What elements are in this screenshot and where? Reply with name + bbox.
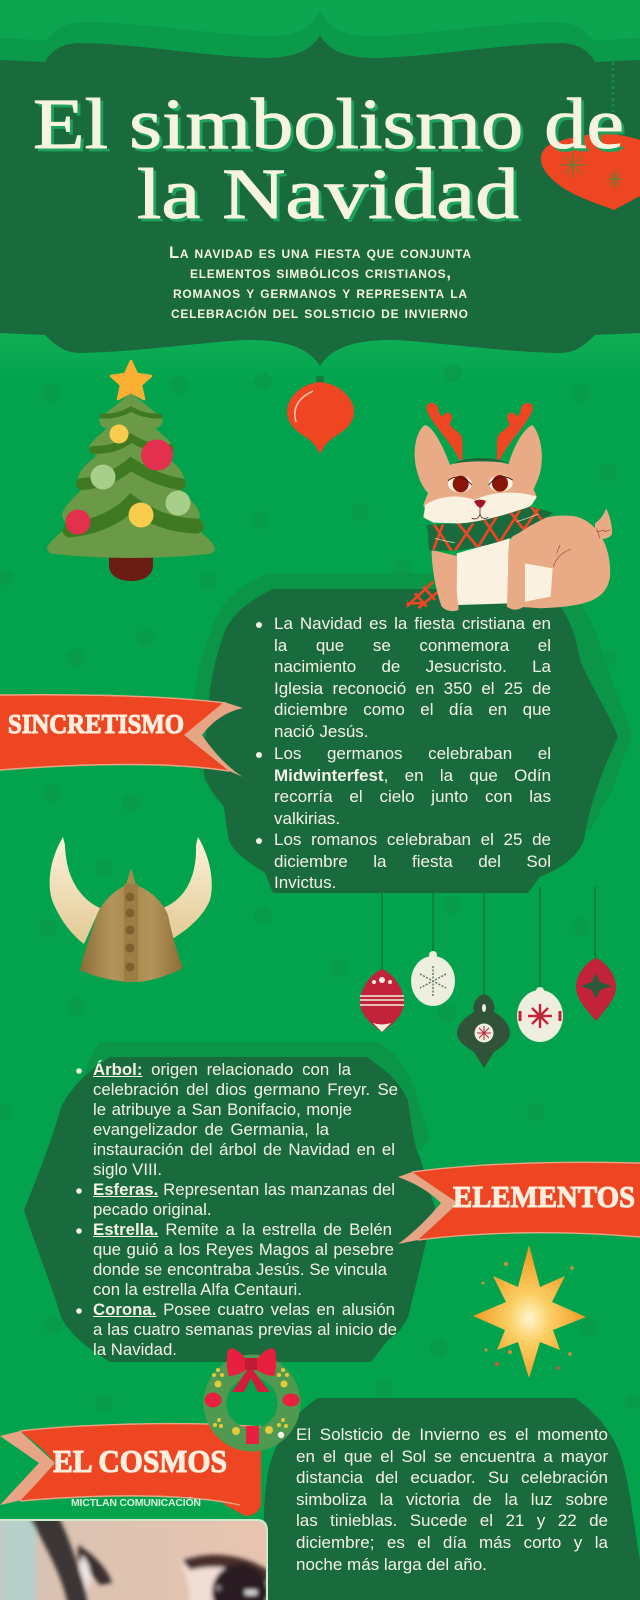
text block: esferas xyxy=(76,1180,395,1219)
subtitle: La navidad es una fiesta que conjunta xyxy=(169,244,471,262)
text block: arbol: Árbol: origen relacionado con la xyxy=(93,1060,351,1079)
title: El simbolismo de xyxy=(36,87,627,167)
panel: elementos back xyxy=(24,1042,435,1362)
icon: red striped ornament xyxy=(360,969,404,1032)
text block: los romanos: Los romanos celebraban el 25 de xyxy=(274,830,551,849)
text block: arbol xyxy=(76,1060,398,1179)
text block: corona: la Navidad. xyxy=(93,1340,177,1359)
text block: la navidad: diciembre como el día en que xyxy=(274,700,551,719)
text block: arbol: le atribuye a San Bonifacio, monje xyxy=(93,1100,352,1119)
text block: estrella: que guió a los Reyes Magos al pesebre xyxy=(93,1240,394,1259)
text block: la navidad: nacimiento de Jesucristo. La xyxy=(274,657,551,676)
text block: estrella: con la estrella Alfa Centauri. xyxy=(93,1280,302,1299)
icon: white snowflake ball xyxy=(411,951,455,1006)
icon: reindeer corgi xyxy=(407,403,612,611)
text block: estrella: Estrella. Remite a la estrella de Belén xyxy=(93,1220,392,1239)
text block: los germanos: valkirias. xyxy=(274,809,340,828)
text block: corona: Corona. Posee cuatro velas en alusión xyxy=(93,1300,395,1319)
icon: gold star xyxy=(473,1245,586,1378)
text block: los germanos: recorría el cielo junto con las xyxy=(274,787,551,806)
text block: corona: a las cuatro semanas previas al inicio de xyxy=(93,1320,397,1339)
text block: los germanos: Midwinterfest, en la que Odín xyxy=(274,766,551,785)
text block: los germanos xyxy=(256,744,551,828)
text block: la navidad: La Navidad es la fiesta cristiana en xyxy=(274,614,551,633)
subtitle: celebración del solsticio de invierno xyxy=(171,304,468,322)
photo: webcam inset xyxy=(0,1515,270,1600)
bullet text: el cosmos: diciembre; es el día más corto y la xyxy=(296,1533,608,1552)
header panel xyxy=(0,8,640,366)
ribbon: el cosmos xyxy=(0,1424,261,1516)
text block: arbol: siglo VIII. xyxy=(93,1160,162,1179)
heading: sincretismo: SINCRETISMO xyxy=(8,709,184,739)
icon: wreath xyxy=(204,1348,300,1444)
bullet text: el cosmos: las tinieblas. Sucede el 21 y 22 de xyxy=(296,1511,608,1530)
icon: red bauble xyxy=(287,376,354,454)
text block: arbol: evangelizador de Germania, la xyxy=(93,1120,329,1139)
bullet text: el cosmos: noche más larga del año. xyxy=(296,1555,487,1574)
hanging ornaments xyxy=(360,887,616,1068)
bullet text: el cosmos: simboliza la victoria de la luz sobre xyxy=(296,1490,608,1509)
text block: la navidad: Iglesia reconoció en 350 el 25 de xyxy=(274,679,551,698)
heading: el cosmos: EL COSMOS xyxy=(53,1443,227,1479)
text block: los romanos: Invictus. xyxy=(274,873,336,892)
text block: la navidad xyxy=(256,614,551,741)
panel: el cosmos xyxy=(264,1398,640,1600)
text block: la navidad: nació Jesús. xyxy=(274,722,368,741)
text block: los romanos xyxy=(256,830,551,892)
icon: red ornament in header xyxy=(541,62,640,210)
icon: dark ornament xyxy=(457,994,510,1068)
subtitle: romanos y germanos y representa la xyxy=(173,284,467,302)
panel: sincretismo back xyxy=(192,573,632,893)
credit: mictlan comunicacion: MICTLAN COMUNICACIÓN xyxy=(71,1496,201,1509)
icon: tree star xyxy=(111,361,151,399)
icon: red teardrop ornament xyxy=(576,958,616,1021)
ribbon: sincretismo xyxy=(0,695,243,777)
icon: viking helmet xyxy=(50,837,212,982)
bullet text: el cosmos: El Solsticio de Invierno es el momento xyxy=(296,1425,608,1444)
text block: corona xyxy=(76,1300,397,1359)
icon: christmas tree xyxy=(47,361,215,581)
bullet text: el cosmos xyxy=(278,1425,608,1574)
text block: estrella xyxy=(76,1220,394,1299)
title xyxy=(33,84,627,237)
subtitle xyxy=(169,244,471,322)
icon: tree baubles xyxy=(66,424,190,534)
bullet text: el cosmos: distancia del ecuador. Su celebración xyxy=(296,1468,608,1487)
text block: los germanos: Los germanos celebraban el xyxy=(274,744,551,763)
text block: la navidad: la que se conmemora el xyxy=(274,636,551,655)
bullet text: el cosmos: en el que el Sol se encuentra a mayor xyxy=(296,1447,608,1466)
text block: esferas: pecado original. xyxy=(93,1200,212,1219)
text block: arbol: celebración del dios germano Freyr. Se xyxy=(93,1080,398,1099)
text block: estrella: donde se encontraba Jesús. Se vincula xyxy=(93,1260,387,1279)
icon: white ball with red flake xyxy=(517,987,563,1042)
subtitle: elementos simbólicos cristianos, xyxy=(190,264,451,282)
title: la Navidad xyxy=(137,154,519,234)
title: la Navidad xyxy=(140,157,522,237)
bullet text: elementos xyxy=(76,1060,398,1359)
text block: esferas: Esferas. Representan las manzanas del xyxy=(93,1180,395,1199)
title: El simbolismo de xyxy=(33,84,624,164)
text block: arbol: instauración del árbol de Navidad en el xyxy=(93,1140,395,1159)
ribbon: elementos xyxy=(398,1162,640,1244)
text block: los romanos: diciembre la fiesta del Sol xyxy=(274,852,551,871)
bullet text: sincretismo xyxy=(256,614,551,892)
